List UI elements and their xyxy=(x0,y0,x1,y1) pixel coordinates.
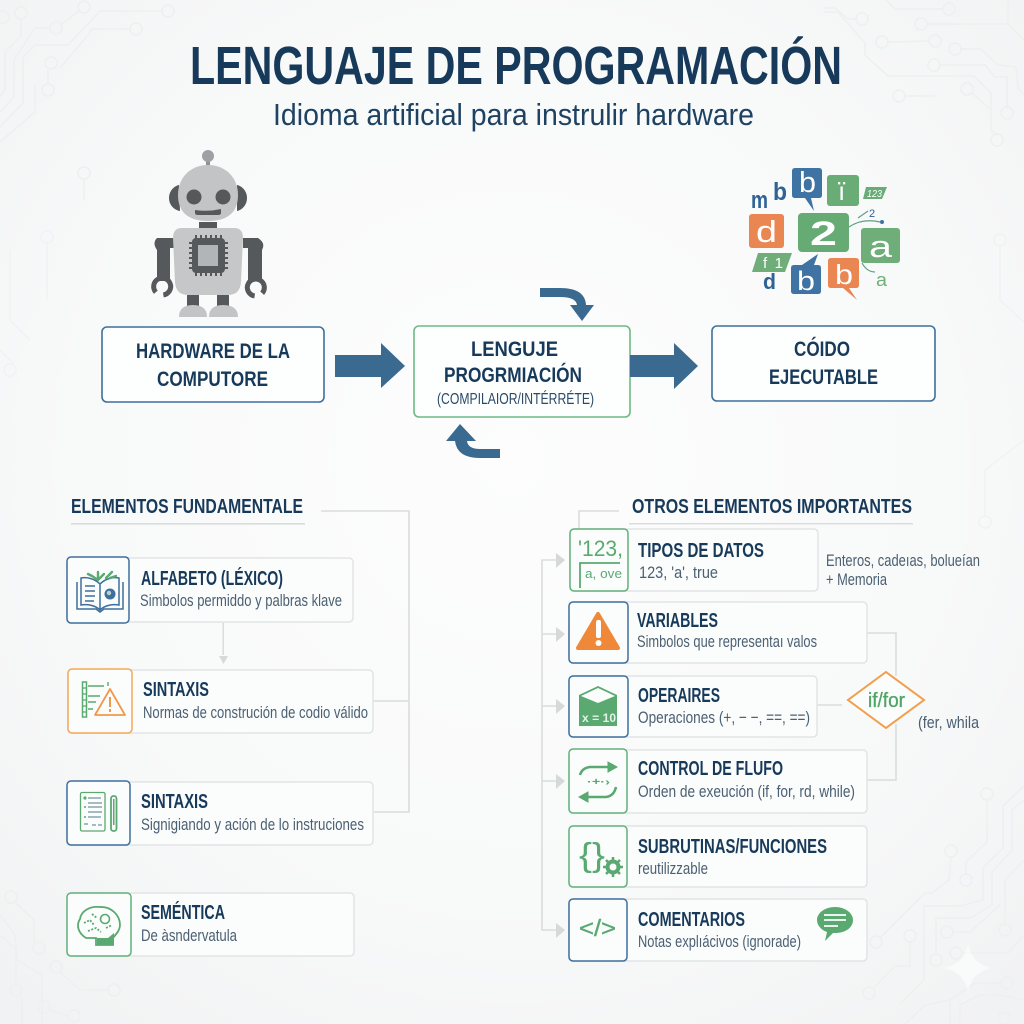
arrow: curved top xyxy=(540,288,594,321)
arrow: language to code xyxy=(630,343,698,389)
panel: tipos de datos: TIPOS DE DATOS xyxy=(638,539,764,562)
title: LENGUAJE DE PROGRAMACIÓN xyxy=(190,36,842,96)
subtitle: Idioma artificial para instrulir hardware xyxy=(273,97,754,132)
panel: subrutinas xyxy=(569,826,867,887)
panel: operadores: Operaciones (+, − −, ==, ==) xyxy=(638,708,810,727)
panel: sintaxis 2: Signigiando y ación de lo instruciones xyxy=(141,815,364,834)
panel: executable code box xyxy=(712,326,935,401)
icon: letter cluster: b xyxy=(797,266,815,296)
panel: language box: PROGRMIACIÓN xyxy=(444,362,582,387)
icon: data types: '123, xyxy=(578,536,623,561)
panel: operadores xyxy=(569,676,817,737)
panel: variables xyxy=(569,602,867,663)
connector: top bracket xyxy=(579,511,619,529)
panel: tipos de datos: 123, 'a', true xyxy=(639,563,718,582)
side note: data types: Enteros, cadeıas, boluеían xyxy=(826,551,980,570)
icon: letter cluster: ï xyxy=(838,176,846,206)
panel: language box xyxy=(414,326,630,417)
panel: sintaxis 2 xyxy=(67,781,373,845)
icon: braces and gear: {} xyxy=(579,836,605,873)
icon: braces and gear xyxy=(579,836,623,877)
icon: data types: a, ove xyxy=(585,566,622,581)
side note: control examples: (fer, whila xyxy=(918,713,979,732)
panel: variables: Simbolos que representaı valos xyxy=(637,632,817,651)
icon: letter cluster: d xyxy=(756,214,777,249)
icon: letter cluster: d xyxy=(763,269,776,294)
icon: letter cluster: b xyxy=(799,167,816,199)
panel: language box: LENGUJE xyxy=(471,337,558,361)
panel: sintaxis 1: Normas de construción de codio válido xyxy=(143,703,368,722)
panel: hardware box: COMPUTORE xyxy=(157,367,268,391)
arrow: alfabeto to sintaxis xyxy=(219,623,228,664)
heading: otros elementos importantes: OTROS ELEMENTOS IMPORTANTES xyxy=(632,495,912,518)
icon: letter cluster: 2 xyxy=(810,215,837,253)
heading: elementos fundamentales: ELEMENTOS FUNDAMENTALE xyxy=(71,495,303,518)
panel: alfabeto xyxy=(67,557,353,623)
panel: comentarios: Notas explıácivos (ignorade) xyxy=(638,932,801,951)
panel: sintaxis 1 xyxy=(68,669,373,733)
arrow: hardware to language xyxy=(335,343,405,388)
icon: checklist with warning xyxy=(82,682,125,717)
panel: semantica: SEMÉNTICA xyxy=(141,901,225,924)
panel: hardware box: HARDWARE DE LA xyxy=(136,339,290,363)
icon: loop arrows xyxy=(579,762,617,802)
icon: letter cluster: 123 xyxy=(867,189,882,200)
icon: letter cluster: m xyxy=(751,187,768,214)
panel: variables: VARIABLES xyxy=(637,609,718,632)
icon: robot xyxy=(152,150,266,317)
panel: tipos de datos xyxy=(570,529,818,591)
icon: code tag: </> xyxy=(579,915,616,941)
panel: alfabeto: Simbolos permiddo y palbras klave xyxy=(140,591,342,610)
panel: sintaxis 1: SINTAXIS xyxy=(143,678,209,701)
panel: sintaxis 2: SINTAXIS xyxy=(141,790,208,813)
side note: data types xyxy=(826,551,980,589)
side note: data types: + Memoria xyxy=(826,570,887,589)
icon: green cube: x = 10 xyxy=(582,711,616,725)
arrow: curved bottom xyxy=(446,424,500,458)
panel: alfabeto: ALFABETO (LÉXICO) xyxy=(141,567,283,590)
icon: data types xyxy=(578,536,623,588)
icon: letter cluster: b xyxy=(773,178,787,206)
icon: open book xyxy=(77,572,123,612)
icon: document and pencil xyxy=(80,792,116,831)
panel: comentarios: COMENTARIOS xyxy=(638,908,745,931)
icon: letter cluster: a xyxy=(876,270,888,290)
panel: operadores: OPERAIRES xyxy=(638,684,720,707)
panel: language box: (COMPILAIOR/INTÉRRÉTE) xyxy=(437,389,594,408)
panel: semantica: De àsndervatula xyxy=(141,926,237,945)
icon: letter cluster: b xyxy=(835,259,853,290)
connector: left bus with arrows xyxy=(542,553,565,938)
icon: loop arrows: ·+·› xyxy=(587,777,610,788)
panel: control de flujo xyxy=(569,749,867,813)
panel: executable code box: EJECUTABLE xyxy=(769,365,878,389)
panel: comentarios xyxy=(569,899,867,961)
panel: control de flujo: Orden de exeución (if, for, rd, while) xyxy=(638,782,855,801)
icon: speech bubble xyxy=(817,907,853,941)
icon: letter cluster xyxy=(749,167,900,300)
decision diamond: if/for xyxy=(848,672,924,728)
icon: letter cluster: f1 xyxy=(763,255,783,272)
icon: green cube xyxy=(579,686,617,726)
icon: letter cluster: 2 xyxy=(869,208,875,220)
panel: subrutinas: SUBRUTINAS/FUNCIONES xyxy=(638,835,827,858)
connector: fundamentals bracket xyxy=(321,511,409,812)
icon: brain xyxy=(78,907,120,945)
panel: semantica xyxy=(67,893,354,956)
panel: executable code box: CÓIDO xyxy=(794,336,850,361)
icon: letter cluster: a xyxy=(869,229,893,264)
panel: control de flujo: CONTROL DE FLUFO xyxy=(638,757,783,780)
panel: subrutinas: reutilizzable xyxy=(638,859,708,878)
icon: warning triangle xyxy=(578,614,618,648)
panel: hardware box xyxy=(102,327,324,402)
connector: variables to control flow via decision xyxy=(817,633,896,780)
decision diamond: if/for: if/for xyxy=(868,690,905,712)
